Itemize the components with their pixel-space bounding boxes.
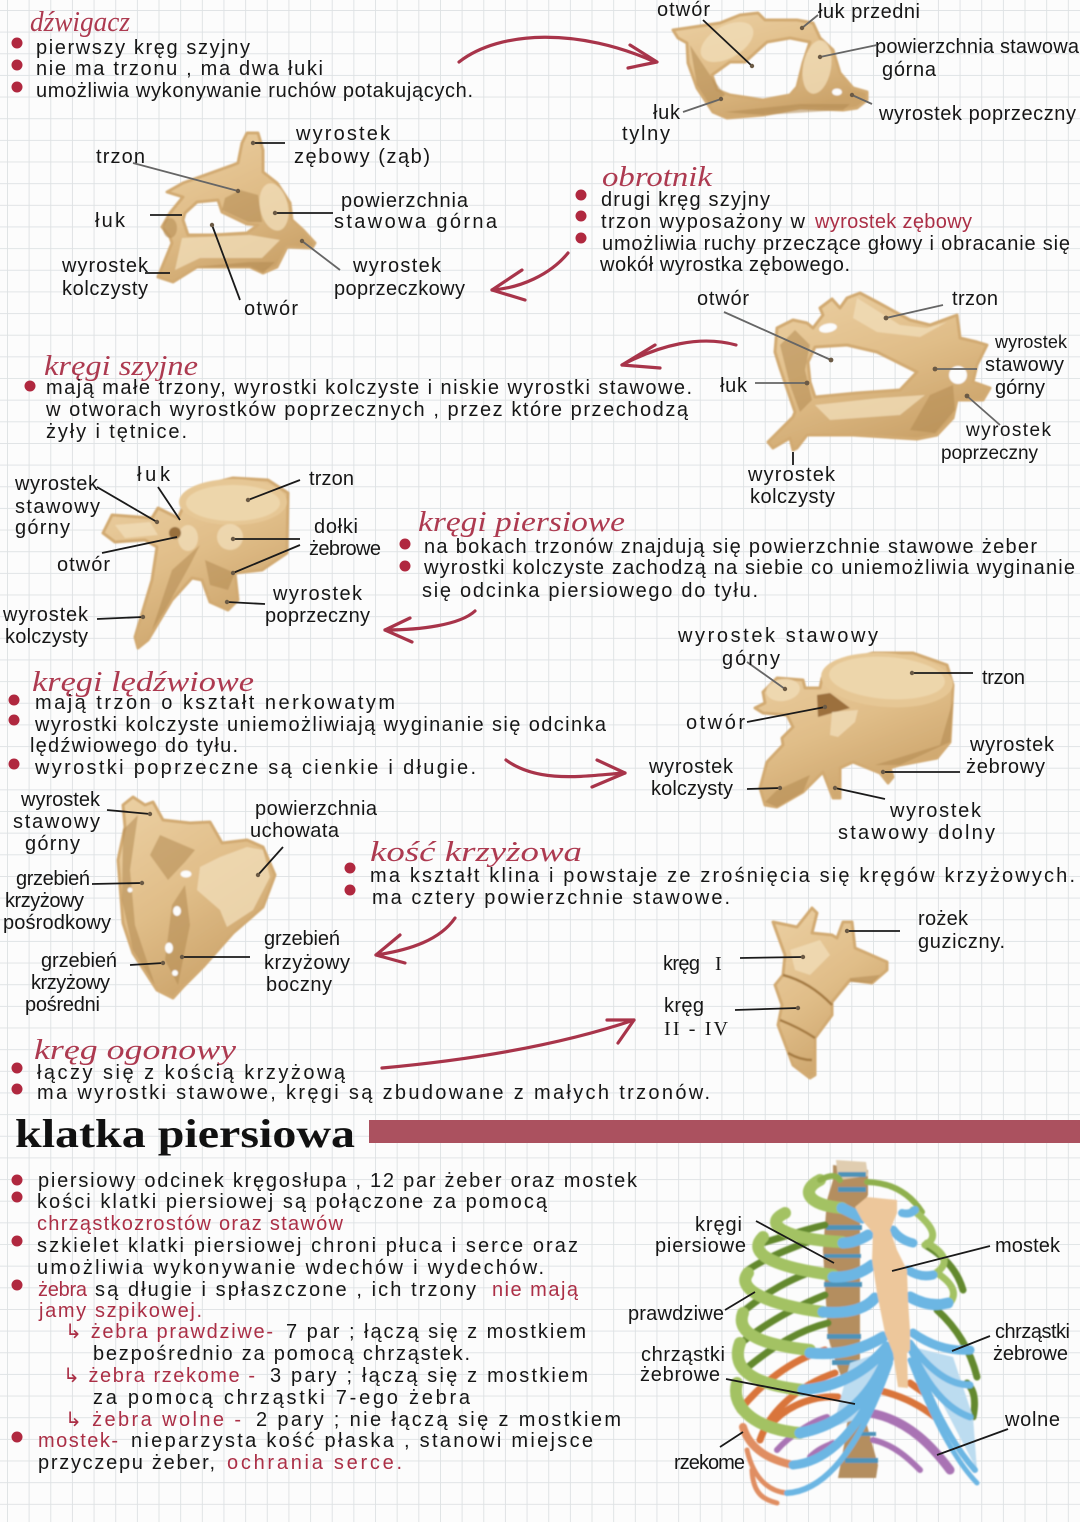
lumbar labels: kolczysty <box>651 778 733 800</box>
illustration: cervical vertebra <box>768 293 990 450</box>
bullet list: drugi kręg szyjny <box>601 189 770 211</box>
axis left labels: otwór <box>244 298 298 320</box>
general description: są długie i spłaszczone , ich trzony <box>95 1279 476 1301</box>
arrow: kręg ogonowy to coccyx illustration <box>382 1020 634 1068</box>
bullet list: wokół wyrostka zębowego. <box>599 254 850 276</box>
rib types: ↳ żebra wolne - <box>65 1409 241 1431</box>
general description: umożliwia wykonywanie wdechów i wydechów. <box>37 1257 544 1279</box>
axis left labels: trzon <box>96 146 145 168</box>
bullets <box>12 1062 22 1094</box>
ribcage labels: chrząstki <box>995 1321 1070 1343</box>
arrow: obrotnik to axis illustration <box>492 253 568 300</box>
ribcage labels: prawdziwe <box>628 1303 724 1325</box>
heading: kręgi piersiowe: kręgi piersiowe <box>418 506 625 538</box>
general description: żebra <box>38 1279 88 1301</box>
heading: obrotnik: obrotnik <box>602 161 713 193</box>
ribcage leader lines <box>720 1221 1008 1455</box>
axis left labels <box>61 123 498 320</box>
bullet list: ma kształt klina i powstaje ze zrośnięcia się kręgów krzyżowych. <box>370 865 1075 887</box>
general description: jamy szpikowej. <box>38 1300 202 1322</box>
atlas labels <box>622 0 1080 145</box>
axis left labels: wyrostek <box>61 255 149 277</box>
bullet list <box>37 1062 710 1104</box>
coccyx labels: rożek <box>918 908 969 930</box>
ribcage labels <box>628 1214 1070 1474</box>
thoracic labels: dołki <box>314 516 358 538</box>
rib types: za pomocą chrząstki 7-ego żebra <box>93 1387 471 1409</box>
section: obrotnik text <box>576 161 1070 276</box>
general description: piersiowy odcinek kręgosłupa , 12 par żeber oraz mostek <box>38 1170 638 1192</box>
section: dźwigacz text <box>12 6 473 102</box>
paragraph <box>45 377 692 443</box>
thoracic labels: łuk <box>137 464 171 486</box>
thoracic labels: wyrostek <box>272 583 363 605</box>
sacrum labels: powierzchnia <box>255 798 378 820</box>
arrow: kręgi lędźwiowe to lumbar illustration <box>506 760 625 787</box>
thoracic labels: wyrostek <box>14 473 99 495</box>
lumbar labels: otwór <box>686 712 745 734</box>
bullets <box>576 190 586 244</box>
bullet list: mają trzon o kształt nerkowatym <box>35 692 395 714</box>
ribcage labels: żebrowe <box>993 1343 1068 1365</box>
section: kręgi szyjne text <box>24 350 692 443</box>
cervical labels: górny <box>995 377 1045 399</box>
illustration: lumbar vertebra <box>755 648 955 807</box>
lumbar labels: wyrostek <box>969 734 1055 756</box>
bullet list: się odcinka piersiowego do tyłu. <box>422 580 758 602</box>
bullet list: wyrostek zębowy <box>814 211 972 233</box>
cervical labels: wyrostek <box>994 332 1068 352</box>
bullets <box>12 38 22 92</box>
sternum description: ochrania serce. <box>227 1452 402 1474</box>
sacrum labels: krzyżowy <box>5 890 84 912</box>
sacrum labels: grzebień <box>264 928 340 950</box>
dark back ribs <box>741 1225 977 1417</box>
rib types: ↳ żebra prawdziwe- <box>65 1321 273 1343</box>
sternum <box>855 1197 910 1388</box>
lumbar labels: wyrostek <box>648 756 734 778</box>
axis left labels: poprzeczkowy <box>334 278 465 300</box>
bullet list: pierwszy kręg szyjny <box>36 37 250 59</box>
sacrum labels: pośrodkowy <box>3 912 111 934</box>
floating ribs <box>777 1413 950 1470</box>
sacrum labels: stawowy <box>13 811 100 833</box>
bullet list: wyrostki kolczyste uniemożliwiają wyginanie się odcinka <box>34 714 607 736</box>
ribcage labels: żebrowe <box>640 1364 720 1386</box>
bullet list: umożliwia wykonywanie ruchów potakujących. <box>36 80 473 102</box>
thoracic leader lines <box>97 480 300 619</box>
bullet <box>24 380 36 392</box>
bullet list: trzon wyposażony w <box>601 211 806 233</box>
sternum description: mostek- <box>38 1430 118 1452</box>
general description: kości klatki piersiowej są połączone za pomocą <box>37 1191 548 1213</box>
bullet list: lędźwiowego do tyłu. <box>30 735 238 757</box>
bullet list <box>370 865 1075 909</box>
bullet list: umożliwia ruchy przeczące głowy i obracanie się <box>602 233 1070 255</box>
coccyx leader lines <box>735 929 900 1010</box>
bullet list: łączy się z kością krzyżową <box>37 1062 346 1084</box>
bullets <box>344 862 356 896</box>
cervical labels: kolczysty <box>750 486 835 508</box>
bullet list: wyrostki poprzeczne są cienkie i długie. <box>34 757 476 779</box>
paragraph: mają małe trzony, wyrostki kolczyste i niskie wyrostki stawowe. <box>46 377 692 399</box>
axis left labels: zębowy (ząb) <box>294 146 430 168</box>
illustration: coccyx <box>773 908 887 1078</box>
section: kręg ogonowy text <box>12 1034 710 1104</box>
cervical leader lines <box>724 305 1000 465</box>
coccyx labels: kręg <box>664 995 704 1017</box>
coccyx labels: kręg <box>663 953 700 975</box>
paragraph: w otworach wyrostków poprzecznych , przez które przechodzą <box>45 399 689 421</box>
title bar <box>369 1120 1080 1143</box>
thoracic labels: stawowy <box>15 496 100 518</box>
illustration: sacrum <box>118 797 275 998</box>
lumbar labels: stawowy dolny <box>838 822 995 844</box>
illustration: thoracic vertebra <box>103 478 288 648</box>
lumbar labels: górny <box>722 648 780 670</box>
bullet list: ma wyrostki stawowe, kręgi są zbudowane z małych trzonów. <box>37 1082 710 1104</box>
ribcage labels: kręgi <box>695 1214 742 1236</box>
general description: chrząstkozrostów oraz stawów <box>37 1213 344 1235</box>
sacrum labels: grzebień <box>41 950 117 972</box>
atlas labels: łuk <box>653 102 681 124</box>
cervical labels <box>697 288 1068 508</box>
bullet list <box>422 536 1075 602</box>
bullet list <box>599 189 1070 276</box>
lumbar labels: żebrowy <box>966 756 1045 778</box>
thoracic labels: kolczysty <box>5 626 88 648</box>
sacrum labels: pośredni <box>25 994 100 1016</box>
paragraph: żyły i tętnice. <box>46 421 187 443</box>
sacrum labels <box>3 789 378 1016</box>
bullets <box>400 538 410 572</box>
axis left labels: wyrostek <box>352 255 442 277</box>
cervical labels: trzon <box>952 288 998 310</box>
lumbar labels <box>648 625 1055 844</box>
bullet list <box>30 692 607 779</box>
false ribs <box>740 1350 935 1503</box>
general description <box>37 1170 638 1322</box>
illustration: ribcage <box>736 1160 977 1503</box>
cervical labels: poprzeczny <box>941 443 1038 464</box>
lumbar labels: wyrostek <box>889 800 982 822</box>
illustration: atlas top right <box>673 13 867 118</box>
axis left labels: wyrostek <box>295 123 391 145</box>
rib types: 7 par ; łączą się z mostkiem <box>286 1321 586 1343</box>
cervical labels: otwór <box>697 288 749 310</box>
thoracic labels: górny <box>15 517 70 539</box>
cervical labels: wyrostek <box>747 464 836 486</box>
atlas labels: powierzchnia stawowa <box>875 36 1080 58</box>
axis left leader lines <box>133 141 340 300</box>
general description: nie mają <box>492 1279 579 1301</box>
thoracic labels <box>2 464 381 648</box>
lumbar labels: trzon <box>982 667 1025 689</box>
spine <box>823 1160 878 1478</box>
axis left labels: łuk <box>95 210 126 232</box>
bullet list <box>36 37 473 102</box>
atlas labels: łuk przedni <box>818 1 920 23</box>
sacrum labels: boczny <box>266 974 332 996</box>
lumbar leader lines <box>747 662 973 799</box>
bullets <box>12 1174 22 1442</box>
coccyx labels <box>663 908 1005 1040</box>
section: kręgi piersiowe text <box>400 506 1075 602</box>
axis left labels: powierzchnia <box>341 190 469 212</box>
thoracic labels: poprzeczny <box>265 605 370 627</box>
arrow: kręgi piersiowe to thoracic illustration <box>385 611 475 642</box>
sacrum leader lines <box>92 810 283 965</box>
atlas labels: wyrostek poprzeczny <box>878 103 1076 125</box>
thoracic labels: wyrostek <box>2 604 89 626</box>
section: klatka piersiowa text <box>12 1170 638 1474</box>
sacrum labels: wyrostek <box>20 789 101 811</box>
heading: dźwigacz: dźwigacz <box>30 6 130 38</box>
sternum description: przyczepu żeber, <box>38 1452 215 1474</box>
sacrum labels: grzebień <box>16 868 90 890</box>
sternum description <box>38 1430 593 1474</box>
bullet list: nie ma trzonu , ma dwa łuki <box>36 58 323 80</box>
bullet list: ma cztery powierzchnie stawowe. <box>372 887 730 909</box>
general description: szkielet klatki piersiowej chroni płuca i serce oraz <box>37 1235 578 1257</box>
sacrum labels: górny <box>25 833 80 855</box>
section: kręgi lędźwiowe text <box>8 666 607 779</box>
sacrum labels: krzyżowy <box>264 952 350 974</box>
bullets <box>8 694 20 770</box>
illustration: axis left <box>158 133 315 282</box>
heading: kość krzyżowa: kość krzyżowa <box>370 836 582 868</box>
ribcage labels: wolne <box>1004 1409 1060 1431</box>
cervical labels: wyrostek <box>965 420 1052 441</box>
heading: kręgi lędźwiowe: kręgi lędźwiowe <box>32 666 254 698</box>
rib types <box>63 1321 621 1431</box>
bullet list: na bokach trzonów znajdują się powierzchnie stawowe żeber <box>424 536 1037 558</box>
ribcage labels: mostek <box>995 1235 1061 1257</box>
coccyx labels: II - IV <box>664 1018 729 1040</box>
true ribs front <box>736 1176 953 1433</box>
costal cartilage <box>787 1208 977 1493</box>
ribcage labels: chrząstki <box>641 1344 725 1366</box>
lumbar labels: wyrostek stawowy <box>677 625 878 647</box>
coccyx labels: I <box>715 953 722 975</box>
sacrum labels: krzyżowy <box>31 972 110 994</box>
axis left labels: stawowa górna <box>334 211 498 233</box>
arrow: kręgi szyjne to cervical illustration <box>622 341 736 368</box>
section: kość krzyżowa text <box>344 836 1075 909</box>
sternum description: nieparzysta kość płaska , stanowi miejsce <box>131 1430 593 1452</box>
thoracic labels: trzon <box>309 468 354 490</box>
ribcage labels: rzekome <box>674 1452 745 1474</box>
atlas leader lines <box>683 15 877 112</box>
thoracic labels: żebrowe <box>309 538 381 560</box>
heading: kręgi szyjne: kręgi szyjne <box>44 350 198 382</box>
arrow: kość krzyżowa to sacrum illustration <box>376 918 455 963</box>
axis left labels: kolczysty <box>62 278 148 300</box>
rib types: 3 pary ; łączą się z mostkiem <box>270 1365 588 1387</box>
thoracic labels: otwór <box>57 554 110 576</box>
cervical labels: stawowy <box>985 354 1064 376</box>
arrow: dźwigacz to atlas illustration <box>459 37 657 68</box>
cervical labels: łuk <box>720 375 748 397</box>
ribcage labels: piersiowe <box>655 1235 746 1257</box>
rib types: bezpośrednio za pomocą chrząstek. <box>93 1343 470 1365</box>
sacrum labels: uchowata <box>250 820 340 842</box>
coccyx labels: guziczny. <box>918 931 1005 953</box>
heading: kręg ogonowy: kręg ogonowy <box>34 1034 236 1066</box>
title: klatka piersiowa: klatka piersiowa <box>15 1111 355 1156</box>
cartilage webbing <box>833 1347 977 1470</box>
rib types: 2 pary ; nie łączą się z mostkiem <box>256 1409 621 1431</box>
bullet list: wyrostki kolczyste zachodzą na siebie co uniemożliwia wyginanie <box>423 557 1075 579</box>
atlas labels: górna <box>882 59 937 81</box>
atlas labels: tylny <box>622 123 670 145</box>
rib types: ↳ żebra rzekome - <box>63 1365 255 1387</box>
